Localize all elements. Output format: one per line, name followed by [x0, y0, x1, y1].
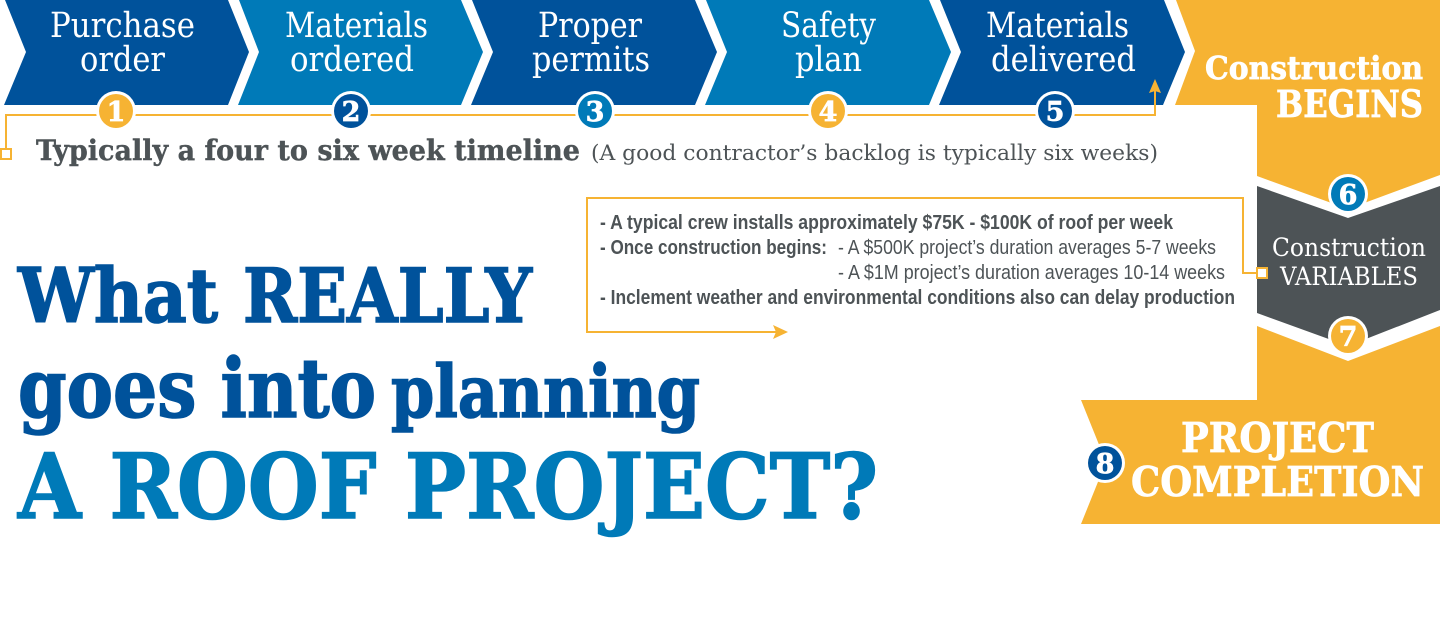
text block: duration details: - Once construction begins:: [600, 237, 827, 259]
badge 3: 3: [586, 97, 604, 128]
arrow: details connector: [587, 198, 1267, 339]
step: purchase order: order: [80, 40, 165, 80]
panel: construction begins and completion orange shape: Construction: [1205, 49, 1423, 87]
text block: duration details: [600, 212, 1235, 309]
step: materials delivered: delivered: [991, 40, 1136, 80]
timeline note: Typically a four to six week timeline: [36, 134, 580, 167]
step: materials delivered: Materials: [986, 6, 1129, 46]
title: A ROOF PROJECT?: [17, 434, 878, 540]
badge 4: [808, 91, 848, 131]
step: purchase order: Purchase: [50, 6, 195, 46]
title: What: [17, 252, 218, 340]
title: [17, 252, 878, 540]
timeline note: (A good contractor’s backlog is typically six weeks): [591, 141, 1158, 165]
badge 8: 8: [1096, 449, 1114, 480]
step: materials ordered: [238, 0, 483, 105]
badge 7: [1328, 316, 1368, 356]
text block: duration details: - A $1M project’s duration averages 10-14 weeks: [838, 262, 1225, 284]
badge 5: [1035, 91, 1075, 131]
badge 5: 5: [1046, 97, 1064, 128]
badge 2: [331, 91, 371, 131]
title: REALLY: [243, 252, 533, 340]
step: safety plan: [705, 0, 951, 105]
step: materials delivered: [939, 0, 1185, 105]
step: proper permits: permits: [532, 40, 650, 80]
step: materials ordered: Materials: [285, 6, 428, 46]
title: planning: [391, 349, 700, 434]
panel: construction variables: VARIABLES: [1279, 262, 1418, 291]
badge 1: [96, 91, 136, 131]
text block: duration details: - Inclement weather and environmental conditions also can delay production: [600, 287, 1235, 309]
badge 3: [575, 91, 615, 131]
step: materials ordered: ordered: [290, 40, 414, 80]
badge 7: 7: [1339, 322, 1357, 353]
panel: construction begins and completion orange shape: PROJECT: [1181, 414, 1374, 462]
badge 1: 1: [107, 97, 125, 128]
text block: duration details: - A $500K project’s duration averages 5-7 weeks: [838, 237, 1216, 259]
badge 6: 6: [1339, 180, 1357, 211]
title: goes into: [18, 342, 376, 437]
badge 4: 4: [819, 97, 837, 128]
timeline note: [36, 134, 1158, 167]
badge 6: [1328, 174, 1368, 214]
text block: duration details: - A typical crew installs approximately $75K - $100K of roof per week: [600, 212, 1174, 234]
panel: construction variables: Construction: [1272, 233, 1426, 262]
panel: construction variables: [1257, 186, 1440, 346]
step: proper permits: [471, 0, 717, 105]
step: purchase order: [4, 0, 249, 105]
panel: construction begins and completion orange shape: BEGINS: [1276, 82, 1423, 126]
step: proper permits: Proper: [538, 6, 642, 46]
step: safety plan: Safety: [781, 6, 876, 46]
badge 2: 2: [342, 97, 360, 128]
arrow: timeline connector: [1, 79, 1161, 159]
step: safety plan: plan: [795, 40, 862, 80]
panel: construction begins and completion orange shape: [1081, 0, 1440, 524]
badge 8: [1085, 443, 1125, 483]
